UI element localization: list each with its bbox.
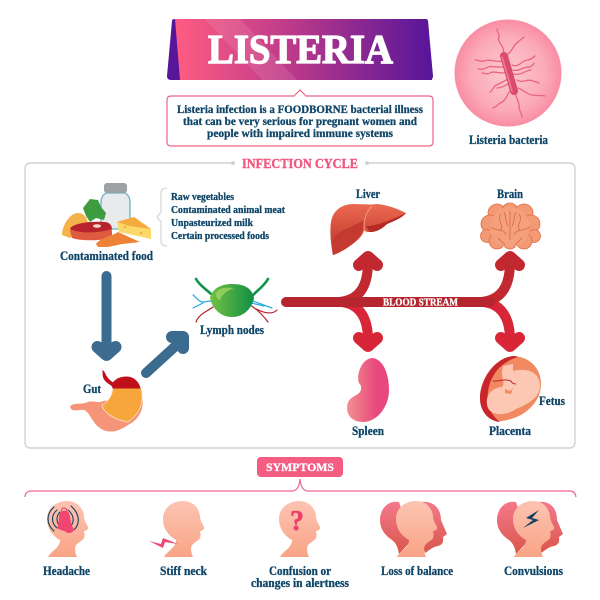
label: Listeria bacteria: Listeria bacteria	[469, 133, 549, 147]
blood stream arrows	[286, 257, 519, 346]
food list: Certain processed foods	[171, 231, 269, 242]
label: confusion: changes in alertness	[251, 576, 349, 590]
icon: liver	[330, 204, 406, 255]
symptom: confusion: ?	[290, 506, 304, 537]
heading: infection cycle: INFECTION CYCLE	[242, 156, 358, 171]
label: placenta: Placenta	[489, 424, 532, 438]
symptom: convulsions	[497, 501, 563, 557]
arrow: food to gut	[98, 276, 116, 355]
icon: brain	[480, 203, 540, 249]
icon: placenta and fetus	[480, 356, 541, 422]
icon: lymph nodes	[193, 279, 277, 322]
food list: Raw vegetables	[171, 192, 234, 203]
icon: contaminated food	[62, 183, 151, 247]
label: lymph nodes: Lymph nodes	[200, 323, 264, 337]
label: fetus: Fetus	[539, 394, 565, 408]
title banner	[167, 19, 433, 80]
symptoms badge	[257, 457, 343, 477]
label: confusion	[251, 564, 349, 590]
food list: Contaminated animal meat	[171, 205, 285, 216]
icon: spleen	[347, 358, 389, 422]
label: loss of balance: Loss of balance	[381, 564, 453, 578]
description callout: people with impaired immune systems	[207, 126, 393, 140]
title banner: LISTERIA	[208, 26, 393, 72]
symptom: loss of balance	[380, 501, 447, 557]
icon: gut	[70, 371, 143, 432]
label: convulsions: Convulsions	[504, 564, 563, 578]
listeria bacteria illustration	[454, 20, 562, 126]
symptom: headache	[47, 501, 88, 557]
label: stiff neck: Stiff neck	[160, 564, 207, 578]
description callout: that can be very serious for pregnant women and	[183, 114, 417, 128]
label: spleen: Spleen	[352, 424, 384, 438]
food list brace	[157, 188, 167, 246]
label: confusion: Confusion or	[269, 564, 331, 578]
food list	[171, 192, 285, 242]
label: brain: Brain	[497, 187, 523, 201]
food list: Unpasteurized milk	[171, 218, 253, 229]
label: blood stream: BLOOD STREAM	[383, 298, 458, 308]
symptom: stiff neck	[149, 501, 204, 557]
label: contaminated food: Contaminated food	[60, 249, 153, 263]
label: gut: Gut	[83, 382, 102, 396]
description callout: Listeria infection is a FOODBORNE bacterial illness	[177, 102, 423, 116]
panel: infection cycle	[25, 161, 575, 448]
symptoms badge: SYMPTOMS	[266, 460, 334, 474]
description callout	[167, 90, 433, 146]
symptoms bracket	[25, 479, 576, 497]
arrow: gut to lymph nodes	[146, 337, 183, 373]
label: liver: Liver	[356, 187, 380, 201]
label: headache: Headache	[43, 564, 90, 578]
symptom: confusion	[279, 501, 320, 557]
